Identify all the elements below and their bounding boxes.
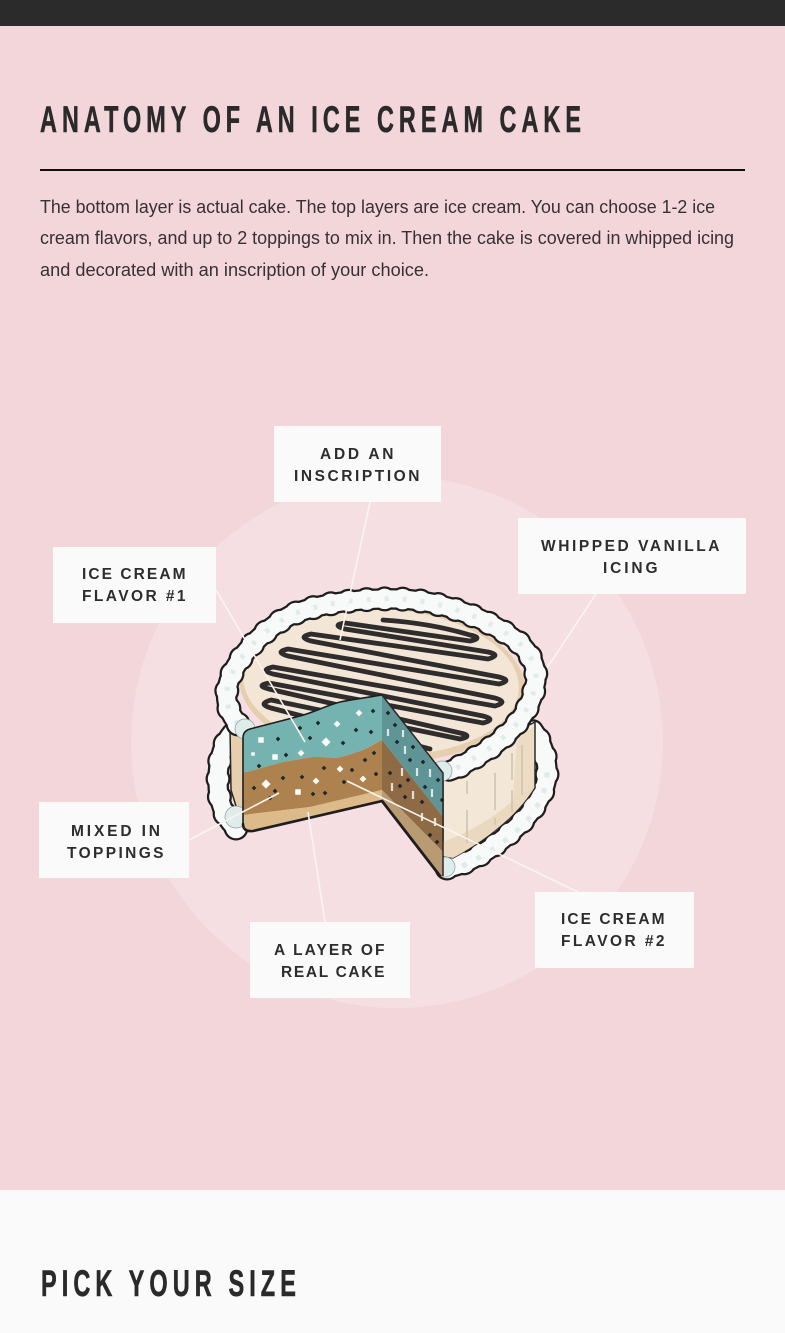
left cake side bbox=[230, 722, 245, 816]
top whipped icing ring bbox=[227, 599, 536, 771]
cut wedge front face: ice cream flavor 2 bbox=[243, 740, 382, 815]
label: a layer of real cake bbox=[250, 922, 410, 998]
heading: pick your size: PICK YOUR SIZE bbox=[41, 1263, 301, 1304]
cake illustration bbox=[189, 502, 596, 922]
intro paragraph bbox=[40, 197, 734, 280]
intro paragraph: cream flavors, and up to 2 toppings to mix in. Then the cake is covered in whipped icing bbox=[40, 228, 734, 248]
label: mixed in toppings bbox=[39, 802, 189, 878]
label: ice cream flavor 2: FLAVOR #2 bbox=[561, 933, 664, 950]
lower frosting, left arc bbox=[218, 733, 236, 828]
cake top bbox=[235, 599, 529, 769]
intro paragraph: The bottom layer is actual cake. The top layers are ice cream. You can choose 1-2 ice bbox=[40, 197, 715, 217]
label: whipped vanilla icing: ICING bbox=[603, 560, 658, 577]
label: ice cream flavor 2: ICE CREAM bbox=[561, 911, 664, 928]
label: add an inscription bbox=[274, 426, 441, 502]
icing end caps bbox=[225, 719, 455, 877]
label: whipped vanilla icing: WHIPPED VANILLA bbox=[541, 538, 720, 555]
dark toppings bbox=[254, 711, 442, 842]
label: a layer of real cake: REAL CAKE bbox=[281, 964, 384, 981]
label: whipped vanilla icing bbox=[518, 518, 746, 594]
pale background circle bbox=[131, 476, 663, 1008]
chocolate drizzle inscription bbox=[262, 620, 506, 749]
intro paragraph: and decorated with an inscription of your choice. bbox=[40, 260, 429, 280]
label: ice cream flavor 1 bbox=[53, 547, 216, 623]
white section background bbox=[0, 1190, 785, 1333]
label: ice cream flavor 1: FLAVOR #1 bbox=[82, 588, 186, 605]
leader lines bbox=[189, 502, 596, 922]
cut wedge front face: real cake layer bbox=[243, 790, 382, 831]
label: add an inscription: ADD AN bbox=[320, 446, 394, 463]
cut wedge right face bbox=[382, 695, 443, 878]
label: mixed in toppings: MIXED IN bbox=[71, 823, 160, 840]
label: ice cream flavor 1: ICE CREAM bbox=[82, 566, 186, 583]
label: a layer of real cake: A LAYER OF bbox=[274, 942, 384, 959]
top dark bar bbox=[0, 0, 785, 26]
label: mixed in toppings: TOPPINGS bbox=[67, 845, 164, 862]
right cake side bbox=[443, 722, 535, 858]
cut wedge front face: ice cream flavor 1 bbox=[243, 695, 382, 773]
white toppings bbox=[253, 713, 435, 826]
label: ice cream flavor 2 bbox=[535, 892, 694, 968]
wedge outline bbox=[243, 695, 382, 831]
lower frosting, right arc bbox=[447, 730, 547, 868]
label: add an inscription: INSCRIPTION bbox=[294, 468, 420, 485]
